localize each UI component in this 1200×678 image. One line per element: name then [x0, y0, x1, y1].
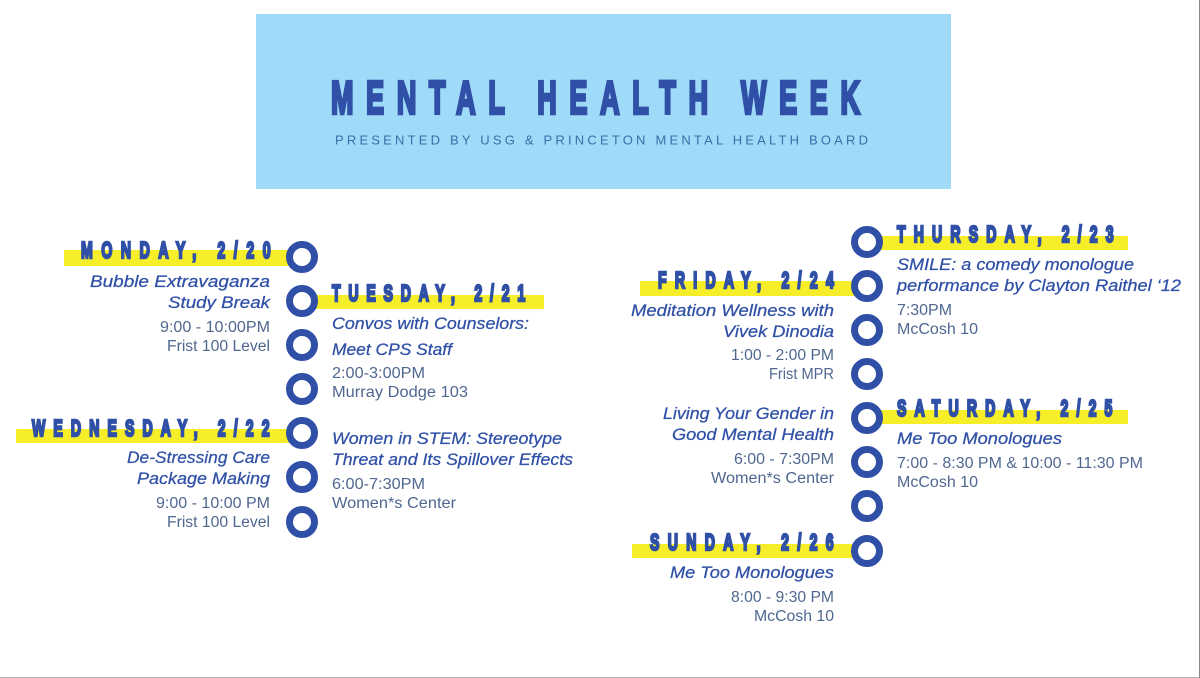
heading: Saturday: SATURDAY, 2/25 — [897, 395, 1113, 422]
event: De-Stressing Care Package Making: Package Making — [137, 469, 271, 488]
heading: Tuesday: TUESDAY, 2/21 — [332, 280, 525, 307]
event: Me Too Monologues Saturday: 7:00 - 8:30 PM & 10:00 - 11:30 PM — [897, 455, 1143, 472]
event: Living Your Gender: 6:00 - 7:30PM — [734, 451, 834, 468]
event: Meditation Wellness: 1:00 - 2:00 PM — [731, 347, 834, 364]
event: Living Your Gender: Women*s Center — [711, 470, 834, 487]
event: SMILE: McCosh 10 — [897, 321, 978, 338]
event: Me Too Monologues Saturday — [897, 429, 1143, 491]
event: Me Too Monologues Sunday — [670, 563, 835, 625]
event: Women in STEM: Threat and Its Spillover Effects — [332, 450, 574, 469]
panel: Tuesday — [314, 280, 574, 512]
event: Convos with Counselors: Meet CPS Staff — [332, 340, 454, 359]
event: SMILE: performance by Clayton Raithel ‘12 — [896, 276, 1182, 295]
heading: Sunday: SUNDAY, 2/26 — [650, 529, 834, 556]
event: De-Stressing Care Package Making: De-Stressing Care — [127, 448, 270, 467]
event: Convos with Counselors: Convos with Counselors: — [332, 314, 529, 333]
header banner — [256, 14, 951, 189]
event: Women in STEM: Women in STEM: Stereotype — [332, 429, 562, 448]
heading: Wednesday: WEDNESDAY, 2/22 — [32, 415, 270, 442]
heading: Monday: MONDAY, 2/20 — [81, 237, 271, 264]
panel: Friday — [631, 267, 859, 487]
event: Women in STEM: 6:00-7:30PM — [332, 476, 425, 493]
event: Convos with Counselors: Murray Dodge 103 — [332, 384, 468, 401]
right timeline rings — [854, 230, 880, 564]
event: Meditation Wellness — [631, 301, 834, 383]
event: Convos with Counselors — [332, 314, 529, 401]
event: Me Too Monologues Sunday: 8:00 - 9:30 PM — [731, 589, 834, 606]
panel: Saturday — [876, 395, 1143, 491]
panel: Wednesday — [16, 415, 294, 531]
panel: Sunday — [632, 529, 859, 625]
subtitle: PRESENTED BY USG & PRINCETON MENTAL HEALTH BOARD — [335, 132, 868, 148]
event: Me Too Monologues Saturday: Me Too Monologues — [897, 429, 1063, 448]
left timeline rings — [290, 244, 314, 534]
panel: Monday — [64, 237, 294, 355]
event: Bubble Extravaganza: Frist 100 Level — [167, 338, 270, 355]
event: Women in STEM: Women*s Center — [332, 495, 456, 512]
event: Meditation Wellness: Vivek Dinodia — [723, 322, 834, 341]
event: SMILE: 7:30PM — [897, 302, 952, 319]
event: Meditation Wellness: Frist MPR — [769, 366, 834, 383]
event: Bubble Extravaganza — [90, 272, 272, 355]
title: MENTAL HEALTH WEEK — [331, 73, 860, 125]
event: Meditation Wellness: Meditation Wellness with — [631, 301, 834, 320]
event: Me Too Monologues Sunday: McCosh 10 — [754, 608, 834, 625]
event: Living Your Gender: Good Mental Health — [672, 425, 834, 444]
event: Me Too Monologues Sunday: Me Too Monologues — [670, 563, 835, 582]
event: De-Stressing Care Package Making: Frist 100 Level — [167, 514, 270, 531]
event: Bubble Extravaganza: Study Break — [168, 293, 272, 312]
event: De-Stressing Care Package Making: 9:00 - 10:00 PM — [156, 495, 270, 512]
event: De-Stressing Care Package Making — [127, 448, 271, 531]
event: Bubble Extravaganza: 9:00 - 10:00PM — [160, 319, 270, 336]
event: Bubble Extravaganza: Bubble Extravaganza — [90, 272, 270, 291]
event: SMILE: SMILE: a comedy monologue — [897, 255, 1134, 274]
event: Living Your Gender — [663, 404, 834, 487]
heading: Friday: FRIDAY, 2/24 — [658, 267, 834, 294]
event: SMILE — [896, 255, 1182, 338]
heading: Thursday: THURSDAY, 2/23 — [897, 221, 1114, 248]
panel: Thursday — [876, 221, 1182, 338]
event: Living Your Gender: Living Your Gender in — [663, 404, 834, 423]
event: Me Too Monologues Saturday: McCosh 10 — [897, 474, 978, 491]
event: Convos with Counselors: 2:00-3:00PM — [332, 365, 425, 382]
event: Women in STEM — [332, 429, 574, 512]
